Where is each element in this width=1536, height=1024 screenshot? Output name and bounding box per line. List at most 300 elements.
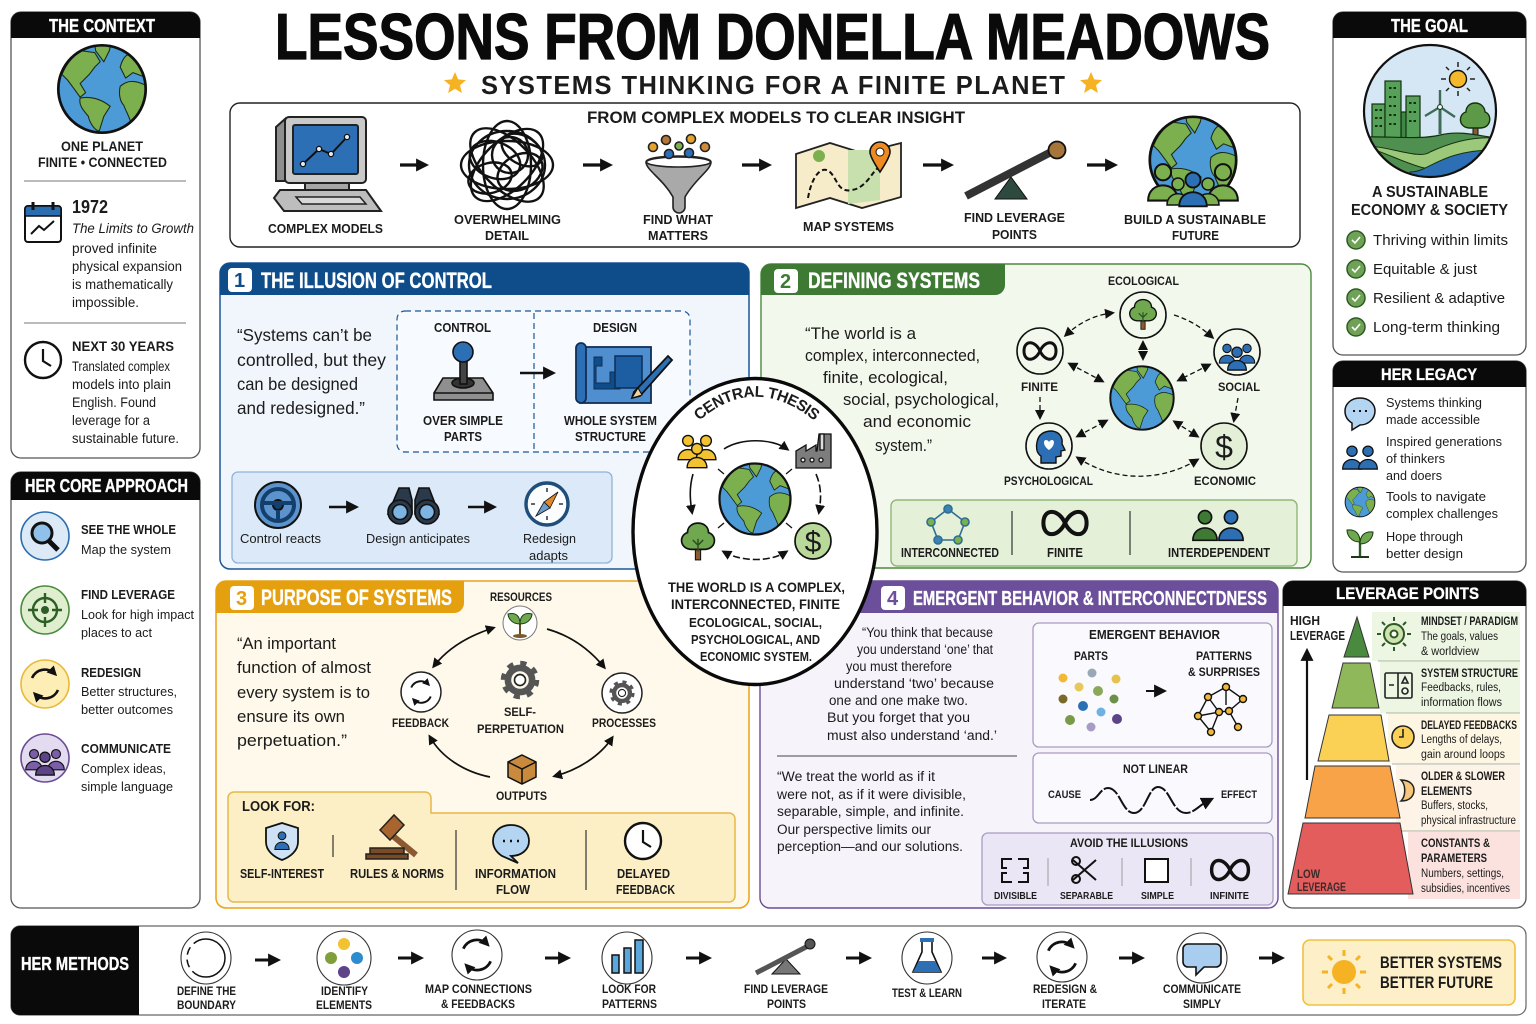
text: 1972: physical expansion — [72, 259, 182, 274]
arrow — [520, 372, 547, 374]
step: find leverage points: FIND LEVERAGE — [744, 984, 828, 996]
icon: map with pin — [796, 142, 901, 208]
icon: network — [927, 505, 969, 544]
find leverage points label: FIND LEVERAGE — [964, 210, 1065, 225]
panel 4 header tab — [780, 581, 1278, 613]
see the whole: SEE THE WHOLE — [81, 522, 176, 537]
whole system structure label: STRUCTURE — [575, 430, 646, 444]
older slower text — [1421, 771, 1516, 827]
leverage header: LEVERAGE POINTS — [1336, 584, 1479, 603]
ecological node — [1108, 274, 1179, 338]
arrow — [1087, 163, 1109, 167]
communicate: simple language — [81, 779, 173, 794]
cycle arrows — [430, 628, 612, 777]
constants text: Numbers, settings, — [1421, 868, 1504, 880]
systems web diagram — [1004, 274, 1260, 488]
icon: tangle of detail — [458, 116, 556, 214]
quote two — [776, 769, 966, 854]
constants text — [1421, 838, 1510, 895]
find leverage: FIND LEVERAGE — [81, 587, 175, 602]
communicate — [81, 741, 173, 794]
mindset text — [1421, 616, 1518, 658]
emergent heading: EMERGENT BEHAVIOR — [1089, 628, 1220, 642]
icon: dollar coin — [795, 523, 831, 559]
constants text: subsidies, incentives — [1421, 883, 1510, 895]
systems thinking text — [1386, 395, 1482, 427]
arrow — [1259, 956, 1276, 960]
design anticipates label: Design anticipates — [366, 531, 470, 546]
find leverage — [81, 587, 194, 640]
icon: joystick — [434, 342, 493, 400]
one planet caption — [38, 138, 167, 170]
icon: sun — [1322, 950, 1366, 994]
arrow — [1119, 956, 1136, 960]
feedback node: FEEDBACK — [392, 716, 449, 730]
whole system structure label: WHOLE SYSTEM — [564, 414, 657, 428]
find leverage: places to act — [81, 625, 152, 640]
mindset text: The goals, values — [1421, 631, 1498, 643]
quote: “Systems can’t be — [237, 325, 372, 345]
icon: clock — [25, 342, 61, 378]
central thesis curved heading: CENTRAL THESIS — [694, 386, 820, 420]
communicate: Complex ideas, — [81, 761, 166, 776]
communicate: COMMUNICATE — [81, 741, 171, 756]
arrow — [742, 163, 763, 167]
quote one — [827, 625, 997, 743]
quote: ensure its own — [237, 707, 345, 726]
over simple parts label: PARTS — [444, 430, 482, 444]
step: redesign and iterate: REDESIGN & — [1033, 984, 1097, 996]
quote: complex, interconnected, — [805, 346, 980, 365]
simple — [1141, 859, 1174, 902]
systems thinking text: Systems thinking — [1386, 395, 1482, 410]
panel 1 header: THE ILLUSION OF CONTROL — [261, 268, 492, 293]
parts column: PARTS — [1074, 651, 1108, 663]
panel 2 header tab: DEFINING SYSTEMS — [808, 268, 980, 293]
icon: globe — [1345, 486, 1376, 517]
step: define the boundary: DEFINE THE — [177, 986, 236, 998]
low leverage label: LEVERAGE — [1297, 882, 1346, 894]
not linear box — [1033, 753, 1272, 823]
arrow — [583, 163, 604, 167]
icon: target — [21, 586, 69, 634]
panel: the goal — [1333, 12, 1526, 355]
step: redesign and iterate — [1033, 932, 1097, 1011]
social node: SOCIAL — [1218, 380, 1260, 394]
arrow — [982, 956, 998, 960]
text: next 30 years: English. Found — [72, 395, 156, 410]
not linear box: NOT LINEAR — [1123, 762, 1188, 776]
hope text — [1386, 529, 1463, 561]
icon: shield — [266, 823, 298, 860]
quote: “The world is a — [805, 324, 917, 343]
step: communicate simply: COMMUNICATE — [1163, 984, 1241, 996]
step: map connections: & FEEDBACKS — [441, 999, 515, 1011]
context header: THE CONTEXT — [49, 16, 155, 36]
delayed feedback label: FEEDBACK — [616, 883, 675, 897]
older slower text: OLDER & SLOWER — [1421, 771, 1506, 783]
panel: her core approach — [11, 472, 200, 908]
quote: controlled, but they — [237, 350, 386, 370]
self-perpetuation gear: SELF- — [504, 705, 536, 719]
icon: magnifier — [21, 512, 69, 560]
quote two: perception—and our solutions. — [777, 839, 963, 854]
complex models label: COMPLEX MODELS — [268, 221, 383, 236]
arrow — [255, 958, 272, 962]
information flow label: INFORMATION — [475, 867, 556, 881]
step: communicate simply: SIMPLY — [1183, 999, 1221, 1011]
context header — [11, 12, 200, 38]
icon: funnel — [646, 134, 711, 213]
one planet caption: FINITE • CONNECTED — [38, 154, 167, 170]
arrow — [846, 956, 863, 960]
band: her methods — [11, 926, 1526, 1015]
quote: function of almost — [237, 658, 371, 677]
legacy header — [1333, 361, 1526, 387]
patterns column: PATTERNS — [1196, 651, 1252, 663]
constants text: PARAMETERS — [1421, 853, 1487, 865]
divisible — [994, 859, 1037, 902]
icon: people — [678, 435, 716, 468]
information flow label — [475, 867, 556, 897]
arrow — [686, 956, 703, 960]
avoid the illusions box — [982, 833, 1273, 905]
better systems text: BETTER FUTURE — [1380, 974, 1493, 992]
one planet caption: ONE PLANET — [61, 138, 143, 154]
icon: structure book — [1385, 673, 1412, 698]
central thesis ellipse — [631, 376, 879, 686]
reacts anticipates adapts box — [232, 472, 612, 563]
find leverage: Look for high impact — [81, 607, 194, 622]
icon: factory — [796, 434, 831, 468]
delayed feedback label: DELAYED — [617, 867, 670, 881]
interconnected label: INTERCONNECTED — [901, 546, 999, 560]
separable: SEPARABLE — [1060, 890, 1113, 902]
icon: earth globe — [58, 44, 148, 133]
title: LESSONS FROM DONELLA MEADOWS — [275, 0, 1270, 73]
icon: blueprint and pencil — [576, 343, 672, 403]
feedback node — [392, 672, 449, 730]
leverage pyramid — [1288, 617, 1413, 894]
icon: dollar coin: $ — [805, 526, 822, 559]
panel 4 header tab: EMERGENT BEHAVIOR & INTERCONNECTDNESS — [913, 588, 1267, 610]
step: find leverage points — [744, 939, 828, 1011]
quote one: you must therefore — [846, 659, 952, 674]
arrow — [545, 956, 562, 960]
icon: two people — [1193, 511, 1243, 540]
look for heading: LOOK FOR: — [242, 799, 315, 815]
step: identify elements: ELEMENTS — [316, 1000, 372, 1012]
quote one: one and one make two. — [829, 693, 968, 708]
low leverage label — [1297, 869, 1346, 894]
quote: “An important — [237, 634, 336, 653]
high leverage label: HIGH — [1290, 613, 1320, 628]
structure text: Feedbacks, rules, — [1421, 682, 1501, 694]
older slower text: Buffers, stocks, — [1421, 800, 1488, 812]
over simple parts label — [423, 414, 503, 444]
tools text: Tools to navigate — [1386, 489, 1486, 504]
quote one: But you forget that you — [827, 710, 970, 725]
inspired generations text: of thinkers — [1386, 451, 1445, 466]
step: map connections: MAP CONNECTIONS — [425, 984, 532, 996]
processes node: PROCESSES — [592, 716, 656, 730]
arrow — [468, 506, 488, 508]
better systems text: BETTER SYSTEMS — [1380, 954, 1502, 972]
text: next 30 years: models into plain — [72, 377, 171, 392]
tools text — [1386, 489, 1498, 521]
redesign adapts label: Redesign — [523, 531, 576, 546]
panel 1 header: 1 — [234, 270, 245, 292]
outputs node — [496, 755, 547, 803]
quote: social, psychological, — [843, 390, 999, 409]
icon: tree — [682, 523, 714, 560]
quote two: Our perspective limits our — [777, 822, 931, 837]
build sustainable future label — [1124, 212, 1266, 243]
icon: slow elements — [1401, 780, 1414, 801]
legacy header: HER LEGACY — [1381, 365, 1478, 384]
central globe — [1110, 365, 1175, 430]
panel 4 header tab: 4 — [887, 588, 899, 610]
step: test and learn: TEST & LEARN — [892, 988, 962, 1000]
panel: leverage points — [1283, 581, 1526, 908]
build sustainable future label: FUTURE — [1172, 228, 1219, 243]
older slower text: ELEMENTS — [1421, 786, 1472, 798]
methods header — [11, 926, 139, 1015]
panel 3: purpose of systems — [216, 581, 749, 908]
goal statement — [1351, 184, 1508, 219]
quote: perpetuation.” — [237, 731, 347, 750]
over simple parts label: OVER SIMPLE — [423, 414, 503, 428]
text: 1972: is mathematically — [72, 277, 173, 292]
outputs node: OUTPUTS — [496, 789, 547, 803]
icon: delay clock — [625, 823, 661, 859]
panel heading: FROM COMPLEX MODELS TO CLEAR INSIGHT — [587, 108, 966, 127]
infinite — [1210, 861, 1249, 902]
icon: compass — [526, 483, 568, 525]
subtitle: SYSTEMS THINKING FOR A FINITE PLANET — [481, 72, 1065, 100]
high leverage label — [1290, 613, 1345, 643]
quote two: were not, as if it were divisible, — [776, 787, 966, 802]
text: 1972: 1972 — [72, 197, 108, 217]
icon: lever — [966, 142, 1066, 199]
quote: and redesigned.” — [237, 398, 365, 418]
core approach header: HER CORE APPROACH — [25, 476, 188, 496]
step: map connections — [425, 930, 532, 1011]
design label: DESIGN — [593, 321, 637, 335]
icon: calendar — [25, 202, 61, 242]
self-perpetuation cycle diagram — [392, 592, 656, 803]
overwhelming detail label — [454, 212, 561, 243]
step: define the boundary: BOUNDARY — [177, 1000, 236, 1012]
quote: every system is to — [237, 683, 370, 702]
self-perpetuation gear — [477, 664, 564, 736]
simple: SIMPLE — [1141, 890, 1174, 902]
panel: the context — [11, 12, 200, 458]
row backgrounds — [1372, 612, 1520, 899]
redesign: better outcomes — [81, 702, 173, 717]
inspired generations text: Inspired generations — [1386, 434, 1502, 449]
arrow: up — [1306, 657, 1308, 780]
icon: infinity — [1043, 512, 1087, 534]
quote two: separable, simple, and infinite. — [777, 804, 964, 819]
finite node: FINITE — [1021, 380, 1058, 394]
mindset text: & worldview — [1421, 646, 1480, 658]
structure text: information flows — [1421, 697, 1502, 709]
panel 3 header tab: 3 — [236, 588, 247, 610]
hope text: Hope through — [1386, 529, 1463, 544]
control reacts label: Control reacts — [240, 531, 321, 546]
icon: people — [1343, 446, 1377, 469]
resources node — [490, 592, 552, 640]
delayed feedbacks text: gain around loops — [1421, 749, 1505, 761]
quote — [237, 634, 371, 750]
thesis statement: PSYCHOLOGICAL, AND — [691, 632, 820, 647]
quote one: “You think that because — [862, 625, 993, 640]
panel 2: defining systems — [761, 264, 1311, 568]
find leverage points label — [964, 210, 1065, 242]
parts column — [1058, 651, 1122, 732]
icon: sprout — [1347, 530, 1373, 558]
quote one: must also understand ‘and.’ — [827, 728, 997, 743]
avoid the illusions box: AVOID THE ILLUSIONS — [1070, 836, 1188, 850]
quote — [237, 325, 386, 418]
quote one: you understand ‘one’ that — [857, 642, 993, 657]
arrow — [400, 163, 420, 167]
icon: steering wheel — [255, 482, 301, 528]
thesis statement: INTERCONNECTED, FINITE — [671, 597, 840, 612]
redesign adapts label: adapts — [529, 548, 568, 563]
processes node — [592, 673, 656, 730]
step: look for patterns: PATTERNS — [602, 999, 657, 1011]
high leverage label: LEVERAGE — [1290, 629, 1345, 643]
redesign: Better structures, — [81, 684, 177, 699]
delayed feedbacks text: Lengths of delays, — [1421, 734, 1502, 746]
build sustainable future label: BUILD A SUSTAINABLE — [1124, 212, 1266, 227]
connector arrows — [1040, 313, 1238, 476]
quote: can be designed — [237, 374, 358, 394]
control vs design dashed box — [397, 311, 690, 452]
text: next 30 years: Translated complex — [72, 359, 170, 374]
panel: her legacy — [1333, 361, 1526, 572]
step: look for patterns — [602, 932, 657, 1011]
step: redesign and iterate: ITERATE — [1042, 999, 1086, 1011]
icon: globe with people — [1148, 115, 1238, 206]
icon: chat bubble — [493, 825, 529, 863]
panel 2 header tab — [761, 264, 1005, 295]
sustainable city illustration — [1364, 45, 1496, 180]
overwhelming detail label: OVERWHELMING — [454, 212, 561, 227]
icon: star left — [444, 72, 466, 93]
emergent behavior box — [1033, 623, 1272, 747]
properties box — [891, 500, 1297, 566]
icon: delay clock — [1392, 726, 1414, 748]
icon: redesign loop — [21, 660, 69, 708]
text: next 30 years: NEXT 30 YEARS — [72, 338, 174, 354]
panel 2 header tab: 2 — [780, 271, 791, 293]
goal checklist: Equitable & just — [1373, 261, 1478, 278]
tools text: complex challenges — [1386, 506, 1498, 521]
icon: central globe — [719, 462, 792, 535]
not linear box: EFFECT — [1221, 789, 1257, 801]
arrow — [329, 506, 350, 508]
find what matters label: MATTERS — [648, 228, 708, 243]
panel: from complex models to clear insight — [230, 103, 1300, 247]
redesign adapts label — [523, 531, 576, 563]
resources node: RESOURCES — [490, 592, 552, 604]
text: 1972: The Limits to Growth — [72, 221, 194, 236]
icon: gavel — [366, 815, 416, 859]
goal checklist: Long-term thinking — [1373, 319, 1500, 336]
icon: chat — [1345, 398, 1375, 430]
ecological node: ECOLOGICAL — [1108, 274, 1179, 288]
panel 3 header tab: PURPOSE OF SYSTEMS — [261, 585, 452, 610]
quote: and economic — [863, 412, 972, 431]
panel 1 header — [220, 263, 749, 295]
older slower text: physical infrastructure — [1421, 815, 1516, 827]
text: 1972 — [72, 197, 194, 310]
constants text: CONSTANTS & — [1421, 838, 1490, 850]
leverage header — [1283, 581, 1526, 606]
inspired generations text: and doers — [1386, 468, 1442, 483]
arrow — [1146, 690, 1158, 692]
redesign: REDESIGN — [81, 665, 141, 680]
systems thinking text: made accessible — [1386, 412, 1480, 427]
text: next 30 years — [72, 338, 179, 446]
economic node: $ — [1215, 429, 1233, 465]
icon: mindset sun — [1377, 617, 1411, 651]
infinite: INFINITE — [1210, 890, 1249, 902]
methods header: HER METHODS — [21, 954, 129, 974]
step: test and learn — [892, 932, 962, 1000]
quote one: understand ‘two’ because — [834, 676, 994, 691]
finite node — [1017, 328, 1063, 394]
find what matters label: FIND WHAT — [643, 212, 713, 227]
patterns column: & SURPRISES — [1188, 667, 1260, 679]
quote: finite, ecological, — [823, 368, 948, 387]
quote — [805, 324, 999, 455]
see the whole — [81, 522, 176, 557]
interdependent label: INTERDEPENDENT — [1168, 546, 1270, 560]
quote two: “We treat the world as if it — [777, 769, 935, 784]
find what matters label — [643, 212, 713, 243]
step: identify elements — [316, 931, 372, 1012]
psychological node — [1004, 423, 1093, 488]
step: identify elements: IDENTIFY — [321, 986, 368, 998]
icon: star right — [1080, 72, 1102, 93]
goal statement: ECONOMY & SOCIETY — [1351, 202, 1508, 219]
self-perpetuation gear: PERPETUATION — [477, 722, 564, 736]
look for box — [228, 792, 735, 902]
map systems label: MAP SYSTEMS — [803, 219, 894, 234]
goal header — [1333, 12, 1526, 38]
control label: CONTROL — [434, 321, 491, 335]
better systems text — [1380, 954, 1502, 992]
delayed feedback label — [616, 867, 675, 897]
economic node: ECONOMIC — [1194, 474, 1256, 488]
structure text — [1421, 668, 1518, 709]
economic node — [1194, 423, 1256, 488]
hope text: better design — [1386, 546, 1463, 561]
social node — [1214, 329, 1260, 394]
thesis statement: ECONOMIC SYSTEM. — [700, 649, 812, 664]
psychological node: PSYCHOLOGICAL — [1004, 474, 1093, 488]
step: communicate simply — [1163, 933, 1241, 1011]
thesis statement: ECOLOGICAL, SOCIAL, — [689, 615, 822, 630]
goal checklist: Resilient & adaptive — [1373, 290, 1505, 307]
panel 4: emergent behavior — [760, 581, 1278, 908]
arrow — [923, 163, 945, 167]
overwhelming detail label: DETAIL — [485, 228, 529, 243]
